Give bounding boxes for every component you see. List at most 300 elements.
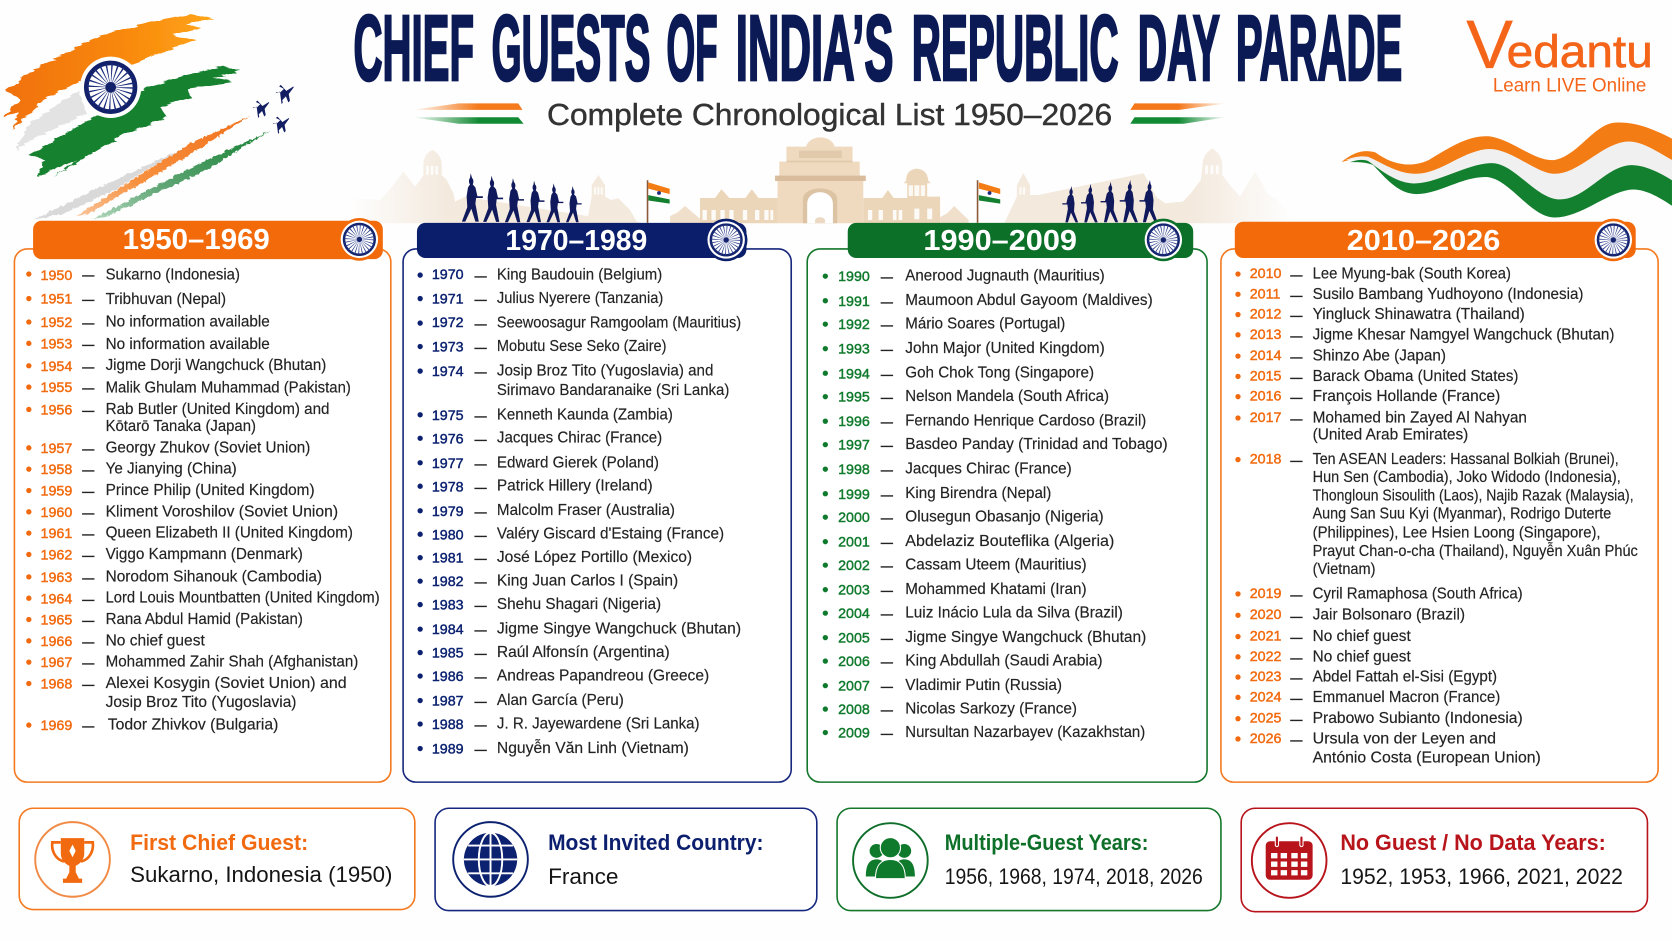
row 1986: 1986	[432, 669, 464, 685]
row 2007: Vladimir Putin (Russia)	[905, 677, 1062, 694]
row 2001: —	[881, 536, 894, 550]
icon: trophy	[35, 822, 110, 897]
row 2003: 2003	[838, 583, 870, 599]
decorative jets with tricolour smoke trails	[33, 85, 294, 220]
row 1989: Nguyễn Văn Linh (Vietnam)	[497, 740, 689, 757]
marching soldiers, right group	[1062, 180, 1158, 222]
row 2016: —	[1290, 391, 1303, 405]
row 2011: 2011	[1250, 286, 1280, 302]
row 1985: —	[475, 647, 488, 661]
row 2020: —	[1290, 609, 1303, 623]
header: 1970–1989: 1970–1989	[505, 225, 647, 257]
row 2000	[823, 509, 1104, 526]
row 1961: 1961	[41, 526, 72, 542]
row 1978	[417, 478, 653, 495]
header: 2010–2026: 2010–2026	[1347, 225, 1500, 257]
row 2004	[823, 605, 1123, 622]
pale skyline, left	[350, 150, 702, 223]
row 2003: —	[881, 584, 894, 598]
row 2002: —	[881, 559, 894, 573]
row 2018: (Philippines), Lee Hsien Loong (Singapore),	[1313, 525, 1601, 542]
row 1967: —	[82, 656, 95, 670]
row 2008: Nicolas Sarkozy (France)	[905, 701, 1077, 718]
row 2026	[1235, 730, 1541, 767]
flag on pole, right	[977, 180, 1000, 223]
row 2025: —	[1290, 713, 1303, 727]
row 2000: —	[881, 511, 894, 525]
row 1968: —	[82, 678, 95, 692]
row 1982	[417, 573, 678, 590]
row 1957: 1957	[41, 441, 72, 457]
row 1997: 1997	[838, 438, 870, 454]
row 2019: —	[1290, 588, 1303, 602]
row 1981	[417, 549, 692, 567]
row 1995: —	[881, 391, 894, 405]
row 1975: Kenneth Kaunda (Zambia)	[497, 406, 673, 423]
pale skyline, right	[940, 148, 1292, 223]
row 1971	[417, 290, 663, 308]
row 1986: —	[475, 670, 488, 684]
row 1972: Seewoosagur Ramgoolam (Mauritius)	[497, 315, 741, 332]
row 2014	[1235, 348, 1446, 365]
row 2004: Luiz Inácio Lula da Silva (Brazil)	[905, 605, 1123, 622]
row 1970: —	[475, 269, 488, 283]
row 1993	[823, 340, 1105, 358]
header: 2010–2026	[1235, 219, 1636, 261]
row 2006: 2006	[838, 654, 870, 670]
row 1979	[417, 502, 675, 520]
row 1971: —	[475, 293, 488, 307]
row 1968	[26, 675, 347, 711]
row 1956	[26, 401, 330, 435]
row 2022: 2022	[1250, 649, 1282, 665]
row 1968: Alexei Kosygin (Soviet Union) and	[106, 675, 347, 692]
row 1973: Mobutu Sese Seko (Zaire)	[497, 338, 666, 355]
row 1963: —	[82, 571, 95, 585]
card: no guest / no data years	[1241, 808, 1647, 912]
row 1964: —	[82, 592, 95, 606]
row 2005: —	[881, 632, 894, 646]
row 2017: 2017	[1250, 410, 1282, 426]
row 1998	[823, 461, 1072, 478]
row 1974: —	[475, 365, 488, 379]
header: 1950–1969: 1950–1969	[123, 224, 270, 256]
India Gate with colonnades	[700, 137, 940, 223]
row 1990: Anerood Jugnauth (Mauritius)	[905, 268, 1105, 285]
row 1980: 1980	[432, 527, 464, 543]
row 1950	[26, 267, 240, 284]
row 1971: 1971	[432, 292, 464, 308]
row 1987: —	[475, 695, 488, 709]
row 2009: Nursultan Nazarbayev (Kazakhstan)	[905, 724, 1145, 741]
header: 1950–1969	[33, 218, 383, 261]
row 1988	[417, 716, 700, 733]
row 2020	[1235, 607, 1465, 624]
row 1972: —	[475, 317, 488, 331]
row 2018	[1235, 451, 1638, 578]
row 1978: 1978	[432, 479, 464, 495]
icon: globe	[453, 822, 528, 897]
row 1990: —	[881, 270, 894, 284]
row 1968: Josip Broz Tito (Yugoslavia)	[106, 694, 296, 711]
row 1973: —	[475, 341, 488, 355]
row 2025: Prabowo Subianto (Indonesia)	[1313, 710, 1523, 727]
marching soldiers, left group	[462, 173, 582, 222]
row 1956: —	[82, 404, 95, 418]
panel: 1990–2009	[807, 219, 1207, 782]
row 2010: —	[1290, 268, 1303, 282]
row 1994: —	[881, 367, 894, 381]
row 1959: Prince Philip (United Kingdom)	[106, 482, 315, 499]
row 1998: 1998	[838, 462, 870, 478]
row 1964: 1964	[41, 591, 72, 607]
row 2004: 2004	[838, 606, 870, 622]
row 2016	[1235, 388, 1500, 405]
row 2020: 2020	[1250, 607, 1282, 623]
row 1986	[417, 668, 709, 685]
row 2013: 2013	[1250, 327, 1282, 343]
row 1957: —	[82, 442, 95, 456]
row 2010: 2010	[1250, 266, 1282, 282]
row 2024: Emmanuel Macron (France)	[1313, 689, 1500, 706]
row 1987	[417, 692, 624, 710]
card: no guest / no data years: No Guest / No Data Years:	[1340, 830, 1606, 855]
row 1974	[417, 363, 729, 399]
row 1989: 1989	[432, 742, 464, 758]
row 1992: Mário Soares (Portugal)	[905, 316, 1065, 333]
row 1970: King Baudouin (Belgium)	[497, 267, 662, 284]
row 1985: 1985	[432, 646, 464, 662]
row 1954: Jigme Dorji Wangchuck (Bhutan)	[106, 357, 326, 374]
right tricolour stripes	[1130, 103, 1226, 124]
row 2018: Thongloun Sisoulith (Laos), Najib Razak (Malaysia),	[1313, 487, 1634, 504]
row 2024: —	[1290, 691, 1303, 705]
row 1998: Jacques Chirac (France)	[905, 461, 1072, 478]
row 1999: 1999	[838, 487, 870, 503]
card: multiple-guest years: 1956, 1968, 1974, 2018, 2026	[945, 864, 1203, 889]
row 1966: —	[82, 635, 95, 649]
row 1952	[26, 314, 270, 331]
row 2009: 2009	[838, 726, 870, 742]
row 1974: 1974	[432, 364, 464, 380]
card: multiple-guest years	[837, 808, 1221, 911]
row 2023: —	[1290, 671, 1303, 685]
row 2017: (United Arab Emirates)	[1313, 427, 1468, 444]
row 1983	[417, 596, 661, 614]
row 1961: Queen Elizabeth II (United Kingdom)	[106, 525, 353, 542]
row 1956: Rab Butler (United Kingdom) and	[106, 401, 330, 418]
row 2012: 2012	[1250, 307, 1282, 323]
row 2006: King Abdullah (Saudi Arabia)	[905, 653, 1103, 670]
Vedantu logo: edantu	[1507, 25, 1653, 77]
row 2018: —	[1290, 454, 1303, 468]
row 2008: 2008	[838, 702, 870, 718]
row 1976	[417, 430, 662, 447]
title	[354, 0, 1402, 100]
row 1973: 1973	[432, 340, 464, 356]
row 1978: Patrick Hillery (Ireland)	[497, 478, 653, 495]
row 2014: Shinzo Abe (Japan)	[1313, 348, 1446, 365]
row 1975	[417, 406, 673, 424]
header: 1970–1989	[417, 219, 747, 261]
row 1966: No chief guest	[106, 632, 206, 649]
decorative tricolour brush flag with Ashoka Chakra	[3, 14, 242, 177]
row 2000: Olusegun Obasanjo (Nigeria)	[905, 509, 1104, 526]
row 1950: —	[82, 268, 95, 282]
row 2002: 2002	[838, 558, 870, 574]
row 2002: Cassam Uteem (Mauritius)	[905, 557, 1087, 574]
flag on pole, left	[647, 180, 670, 223]
row 1970	[417, 267, 662, 284]
row 1974: Josip Broz Tito (Yugoslavia) and	[497, 363, 713, 380]
row 1981: José López Portillo (Mexico)	[497, 549, 692, 566]
row 1995: Nelson Mandela (South Africa)	[905, 388, 1109, 405]
row 1976: —	[475, 432, 488, 446]
row 2014: —	[1290, 350, 1303, 364]
row 1957	[26, 439, 310, 457]
row 1998: —	[881, 463, 894, 477]
row 1989: —	[475, 743, 488, 757]
row 1990: 1990	[838, 269, 870, 285]
row 1988: —	[475, 718, 488, 732]
row 2024: 2024	[1250, 689, 1282, 705]
icon: Ashoka Chakra	[80, 57, 141, 118]
row 1966: 1966	[41, 634, 72, 650]
row 2015: —	[1290, 370, 1303, 384]
row 2017: —	[1290, 412, 1303, 426]
row 2002	[823, 557, 1087, 574]
Vedantu logo: V	[1466, 7, 1514, 83]
row 2026: António Costa (European Union)	[1313, 750, 1541, 767]
row 1979: —	[475, 505, 488, 519]
row 1955: —	[82, 381, 95, 395]
row 1951: —	[82, 293, 95, 307]
row 1992: —	[881, 318, 894, 332]
card: first chief guest: First Chief Guest:	[130, 830, 308, 855]
row 1958: 1958	[41, 462, 72, 478]
row 1963: Norodom Sihanouk (Cambodia)	[106, 568, 322, 585]
row 1975: 1975	[432, 408, 464, 424]
row 1954: —	[82, 360, 95, 374]
card: most invited country: France	[548, 864, 618, 889]
row 1956: Kōtarō Tanaka (Japan)	[106, 418, 256, 435]
row 1999: King Birendra (Nepal)	[905, 485, 1051, 502]
row 2018: Aung San Suu Kyi (Myanmar), Rodrigo Duterte	[1313, 505, 1611, 522]
row 2008	[823, 701, 1077, 718]
row 1984: Jigme Singye Wangchuck (Bhutan)	[497, 621, 741, 638]
row 1969: Todor Zhivkov (Bulgaria)	[108, 717, 278, 734]
row 2016: François Hollande (France)	[1313, 388, 1500, 405]
row 2020: Jair Bolsonaro (Brazil)	[1313, 607, 1465, 624]
row 2003: Mohammed Khatami (Iran)	[905, 581, 1087, 598]
row 1970: 1970	[432, 267, 464, 283]
card: most invited country	[435, 808, 817, 911]
row 1969: —	[82, 719, 95, 733]
row 1990	[823, 268, 1105, 285]
row 2018: (Vietnam)	[1313, 561, 1376, 578]
row 2016: 2016	[1250, 389, 1282, 405]
row 1950: 1950	[41, 268, 72, 284]
row 1964: Lord Louis Mountbatten (United Kingdom)	[106, 590, 380, 607]
row 2026: —	[1290, 733, 1303, 747]
row 1991: 1991	[838, 294, 870, 310]
row 2013: Jigme Khesar Namgyel Wangchuck (Bhutan)	[1313, 326, 1614, 343]
row 1952: 1952	[41, 315, 72, 331]
row 2017: Mohamed bin Zayed Al Nahyan	[1313, 409, 1527, 426]
row 1976: Jacques Chirac (France)	[497, 430, 662, 447]
row 1962	[26, 546, 303, 564]
row 1959: —	[82, 485, 95, 499]
row 1955: Malik Ghulam Muhammad (Pakistan)	[106, 380, 351, 397]
row 2011: Susilo Bambang Yudhoyono (Indonesia)	[1313, 286, 1583, 303]
row 1994: 1994	[838, 366, 870, 382]
row 1982: —	[475, 575, 488, 589]
row 2023: 2023	[1250, 669, 1282, 685]
row 2006: —	[881, 655, 894, 669]
row 1980: —	[475, 528, 488, 542]
row 1992	[823, 316, 1065, 333]
row 1971: Julius Nyerere (Tanzania)	[497, 290, 663, 307]
row 1973	[417, 338, 666, 356]
row 1953: No information available	[106, 336, 270, 353]
row 1958: —	[82, 463, 95, 477]
row 1963: 1963	[41, 570, 72, 586]
row 1993: 1993	[838, 342, 870, 358]
row 1987: Alan García (Peru)	[497, 692, 624, 709]
row 2005: Jigme Singye Wangchuck (Bhutan)	[905, 629, 1146, 646]
row 2025: 2025	[1250, 711, 1282, 727]
row 1983: 1983	[432, 598, 464, 614]
row 1996: Fernando Henrique Cardoso (Brazil)	[905, 413, 1146, 430]
row 1952: —	[82, 316, 95, 330]
row 1954: 1954	[41, 359, 72, 375]
row 1981: 1981	[432, 551, 464, 567]
row 1979: Malcolm Fraser (Australia)	[497, 502, 675, 519]
row 1960: —	[82, 506, 95, 520]
row 2021	[1235, 628, 1411, 645]
row 1952: No information available	[106, 314, 270, 331]
row 1967: Mohammed Zahir Shah (Afghanistan)	[106, 654, 358, 671]
row 1955: 1955	[41, 380, 72, 396]
row 2014: 2014	[1250, 348, 1282, 364]
row 2019: 2019	[1250, 586, 1282, 602]
row 1968: 1968	[41, 677, 72, 693]
header: 1990–2009	[848, 219, 1193, 261]
row 2000: 2000	[838, 510, 870, 526]
card: first chief guest: Sukarno, Indonesia (1950)	[130, 862, 392, 887]
row 1972: 1972	[432, 315, 464, 331]
row 2015: Barack Obama (United States)	[1313, 368, 1518, 385]
row 2017	[1235, 409, 1527, 444]
row 1996: 1996	[838, 414, 870, 430]
row 1984: 1984	[432, 622, 464, 638]
row 1965: —	[82, 614, 95, 628]
row 1951: Tribhuvan (Nepal)	[106, 291, 226, 308]
Vedantu logo	[1466, 7, 1653, 97]
row 2022: No chief guest	[1313, 648, 1411, 665]
row 2011: —	[1290, 288, 1303, 302]
row 1995	[823, 388, 1109, 406]
row 1982: 1982	[432, 574, 464, 590]
row 1995: 1995	[838, 390, 870, 406]
row 1974: Sirimavo Bandaranaike (Sri Lanka)	[497, 382, 729, 399]
row 1965: Rana Abdul Hamid (Pakistan)	[106, 611, 303, 628]
row 1996: —	[881, 415, 894, 429]
panel: 1950–1969	[14, 218, 391, 782]
row 1956: 1956	[41, 403, 72, 419]
row 1977	[417, 454, 659, 472]
row 2003	[823, 581, 1087, 599]
icon: calendar	[1252, 823, 1326, 898]
row 1975: —	[475, 409, 488, 423]
row 1986: Andreas Papandreou (Greece)	[497, 668, 709, 685]
row 1997: —	[881, 439, 894, 453]
row 1977: —	[475, 457, 488, 471]
row 1965: 1965	[41, 613, 72, 629]
card: first chief guest	[19, 808, 415, 910]
row 2018: 2018	[1250, 452, 1282, 468]
row 2019: Cyril Ramaphosa (South Africa)	[1313, 585, 1523, 602]
row 2021: —	[1290, 631, 1303, 645]
row 1950: Sukarno (Indonesia)	[106, 267, 240, 284]
row 2013: —	[1290, 329, 1303, 343]
row 1951	[26, 291, 226, 308]
row 2007: —	[881, 680, 894, 694]
row 1989	[417, 740, 689, 758]
row 1980: Valéry Giscard d'Estaing (France)	[497, 526, 724, 543]
row 1977: Edward Gierek (Poland)	[497, 454, 659, 471]
row 2004: —	[881, 607, 894, 621]
row 1961: —	[82, 527, 95, 541]
row 2006	[823, 653, 1103, 670]
row 2021: No chief guest	[1313, 628, 1411, 645]
waving tricolour ribbon	[1341, 123, 1672, 218]
row 2001: Abdelaziz Bouteflika (Algeria)	[905, 533, 1114, 550]
row 1997: Basdeo Panday (Trinidad and Tobago)	[905, 436, 1168, 453]
row 2026: 2026	[1250, 731, 1282, 747]
card: no guest / no data years: 1952, 1953, 1966, 2021, 2022	[1340, 864, 1623, 889]
card: multiple-guest years: Multiple-Guest Years:	[945, 830, 1148, 855]
row 1999	[823, 485, 1051, 503]
row 1983: —	[475, 599, 488, 613]
row 2008: —	[881, 703, 894, 717]
row 1951: 1951	[41, 292, 72, 308]
row 1994: Goh Chok Tong (Singapore)	[905, 365, 1094, 382]
row 1962: Viggo Kampmann (Denmark)	[106, 546, 303, 563]
row 1988: 1988	[432, 717, 464, 733]
row 1985: Raúl Alfonsín (Argentina)	[497, 644, 670, 661]
row 2018: Ten ASEAN Leaders: Hassanal Bolkiah (Brunei),	[1313, 451, 1619, 468]
row 2022	[1235, 648, 1411, 665]
row 2022: —	[1290, 651, 1303, 665]
row 1993: —	[881, 343, 894, 357]
row 2026: Ursula von der Leyen and	[1313, 730, 1496, 747]
row 1967: 1967	[41, 655, 72, 671]
row 2007: 2007	[838, 679, 870, 695]
row 2005: 2005	[838, 631, 870, 647]
Vedantu logo: Learn LIVE Online	[1493, 75, 1646, 97]
row 2001: 2001	[838, 535, 870, 551]
row 2018: Hun Sen (Cambodia), Joko Widodo (Indonesia),	[1313, 469, 1621, 486]
row 1958: Ye Jianying (China)	[106, 461, 237, 478]
row 1994	[823, 365, 1094, 382]
panel: 2010–2026	[1221, 219, 1658, 782]
row 1957: Georgy Zhukov (Soviet Union)	[106, 439, 310, 456]
row 1953: 1953	[41, 336, 72, 352]
panel: 1970–1989	[403, 219, 791, 782]
card: most invited country: Most Invited Country:	[548, 830, 763, 855]
row 2012: Yingluck Shinawatra (Thailand)	[1313, 306, 1525, 323]
